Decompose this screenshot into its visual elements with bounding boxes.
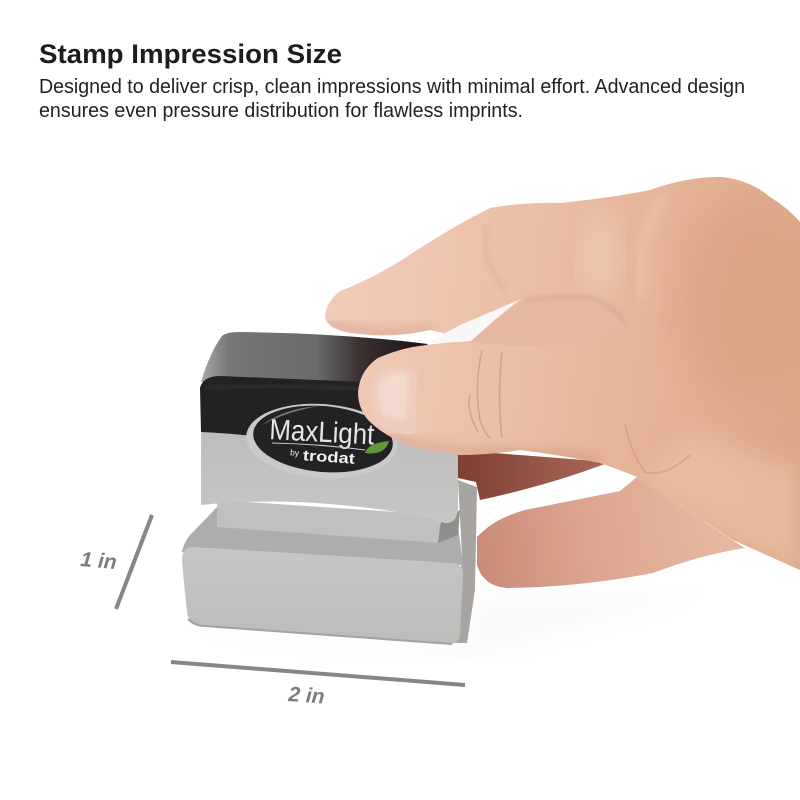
thumb nail <box>372 367 418 434</box>
ground shadow <box>175 590 700 655</box>
stamp neck right shadow <box>438 510 460 543</box>
thumb knuckle creases <box>469 350 502 438</box>
hand ridge highlight <box>639 195 665 300</box>
logo badge <box>250 400 396 478</box>
stamp base front <box>182 547 463 644</box>
logo gloss <box>262 406 320 425</box>
dimension line: width <box>171 662 465 685</box>
stamp base lower edge <box>188 619 452 644</box>
label: 1 in: 1 in <box>80 548 118 574</box>
finger joint shading <box>485 225 505 290</box>
hand silhouette fill <box>320 170 800 580</box>
middle finger shading at index <box>525 296 625 323</box>
stamp base side <box>455 480 477 643</box>
logo subline <box>289 446 355 468</box>
logo subline: by <box>290 447 300 458</box>
infographic canvas <box>40 44 800 704</box>
middle finger <box>470 296 625 346</box>
thumb underside shadow <box>380 436 600 460</box>
logo halo <box>244 399 400 483</box>
logo underline <box>272 443 365 450</box>
description text: ensures even pressure distribution for flawless imprints. <box>39 100 523 122</box>
logo leaf <box>365 441 389 454</box>
title: Stamp Impression Size <box>39 39 342 69</box>
stamp top glossy panel <box>201 332 428 390</box>
dimension line: height <box>116 515 152 609</box>
nail highlight <box>378 372 408 420</box>
stamp body <box>201 425 458 523</box>
index underside shadow <box>325 322 432 334</box>
white gap between fingers <box>430 299 521 342</box>
ring finger in shadow <box>455 450 610 500</box>
logo wordmark: MaxLight <box>269 414 375 451</box>
hand: fingers behind the stamp <box>455 450 745 588</box>
description text <box>39 76 745 122</box>
band highlight <box>206 385 360 390</box>
stamp <box>182 332 477 644</box>
description text: Designed to deliver crisp, clean impressions with minimal effort. Advanced design <box>39 76 745 98</box>
logo subline: trodat <box>302 447 355 468</box>
finger knuckle highlight <box>582 220 620 292</box>
stamp black band <box>200 376 430 440</box>
lower hand pale tone <box>654 436 800 565</box>
stamp neck <box>217 500 441 543</box>
hand: main <box>320 170 800 580</box>
little finger <box>477 477 745 588</box>
stamp base top <box>182 507 463 565</box>
lower hand crease <box>625 425 690 473</box>
back of hand tan tone <box>687 224 768 368</box>
label: 2 in: 2 in <box>287 683 325 709</box>
